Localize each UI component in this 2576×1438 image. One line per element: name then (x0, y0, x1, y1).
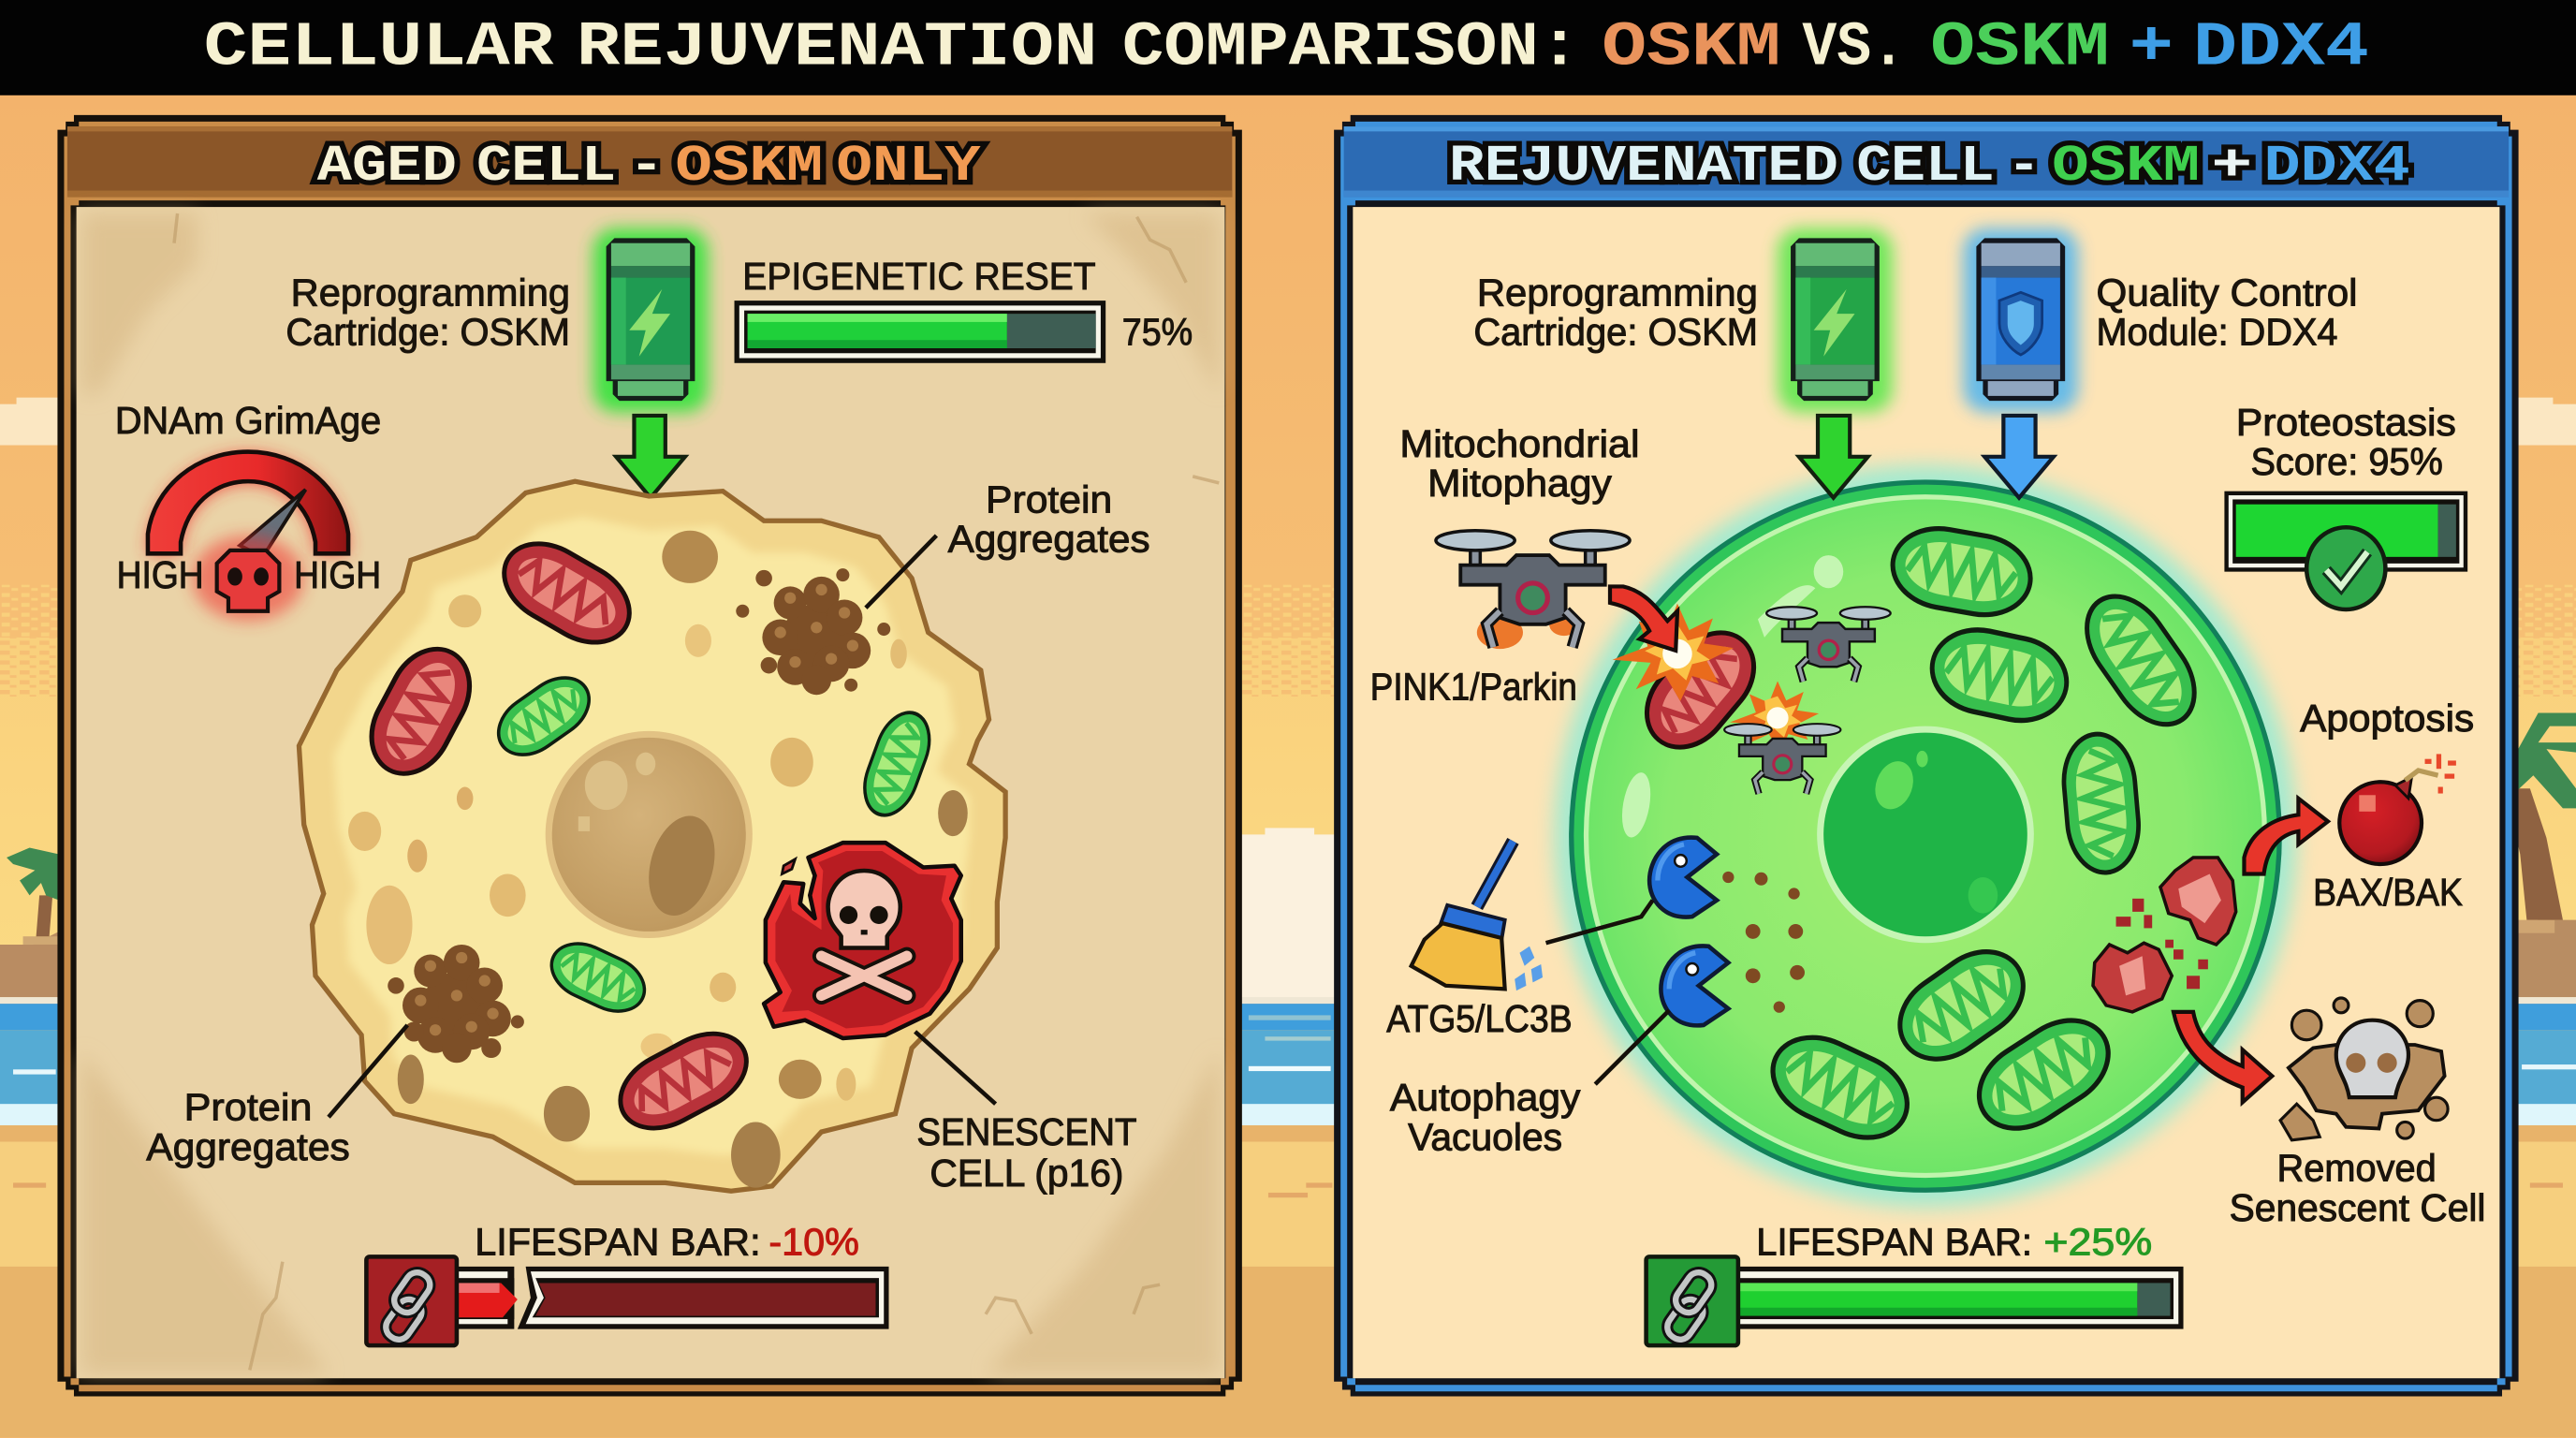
icon: DDX4 quality control module (1963, 228, 2078, 412)
title: REJUVENATION (577, 12, 1097, 83)
label: protein aggregates upper: Aggregates (948, 518, 1150, 561)
label: autophagy vacuoles: Vacuoles (1408, 1115, 1562, 1158)
panel header: rejuvenated (1344, 126, 2509, 198)
nucleus (546, 731, 753, 938)
panel header: aged cell (67, 126, 1232, 198)
arrow: to removed cell (2174, 1012, 2272, 1102)
gauge: DNAm GrimAge: HIGH (117, 553, 204, 596)
lifespan bar: rejuvenated: +25% (2043, 1221, 2152, 1264)
proteostasis score (2224, 401, 2467, 609)
label: protein aggregates lower: Aggregates (146, 1125, 350, 1168)
epigenetic reset bar (735, 255, 1193, 363)
panel: aged cell, OSKM only (57, 115, 1242, 1397)
mitochondria: healthy (1759, 521, 2212, 1153)
label: senescent cell: CELL (p16) (929, 1152, 1123, 1195)
panel header: rejuvenated: + (2211, 139, 2252, 196)
label: autophagy vacuoles: Autophagy (1390, 1076, 1581, 1119)
label: quality control module: Module: DDX4 (2097, 310, 2338, 353)
panel header: rejuvenated: CELL (1856, 139, 1995, 196)
icon: removed senescent cell (2280, 998, 2448, 1140)
lifespan bar: rejuvenated (1647, 1221, 2184, 1345)
title: OSKM (1930, 12, 2110, 83)
label: reprogramming cartridge: Cartridge: OSKM (285, 310, 570, 353)
label: protein aggregates upper (948, 477, 1150, 561)
label: protein aggregates upper: Protein (986, 477, 1112, 521)
panel header: aged cell: AGED (317, 139, 457, 196)
label: BAX/BAK: BAX/BAK (2313, 871, 2463, 914)
panel header: aged cell: OSKM (675, 139, 823, 196)
rejuvenated cell (1554, 465, 2297, 1208)
label: reprogramming cartridge right: Cartridge: OSKM (1473, 310, 1758, 353)
label: reprogramming cartridge right: Reprogramming (1477, 271, 1758, 314)
title (204, 12, 2369, 83)
panel header: rejuvenated: - (2008, 139, 2041, 196)
label: quality control module: Quality Control (2097, 271, 2358, 314)
protein aggregates: lower (388, 945, 524, 1063)
aged cell (299, 481, 1005, 1191)
title: VS. (1802, 12, 1906, 83)
panel header: rejuvenated: OSKM (2052, 139, 2200, 196)
label: senescent cell (916, 1110, 1137, 1195)
label: mitochondrial mitophagy (1399, 422, 1640, 505)
label: removed senescent cell: Removed (2277, 1147, 2437, 1190)
lifespan bar: aged: -10% (768, 1221, 859, 1264)
explosion near small drone (1730, 681, 1819, 753)
lifespan bar: aged (366, 1221, 889, 1345)
epigenetic reset bar: EPIGENETIC RESET (742, 255, 1096, 298)
icon: OSKM reprogramming cartridge (593, 228, 708, 412)
label: reprogramming cartridge (285, 271, 570, 353)
nucleus (1817, 726, 2034, 943)
protein aggregates: upper (736, 568, 890, 695)
title bar (0, 0, 2576, 95)
label: senescent cell: SENESCENT (916, 1110, 1137, 1153)
label: ATG5/LC3B: ATG5/LC3B (1386, 997, 1573, 1040)
label: mitochondrial mitophagy: Mitophagy (1427, 462, 1613, 505)
epigenetic reset bar: 75% (1122, 310, 1193, 353)
proteostasis score: Score: 95% (2250, 440, 2443, 483)
arrow: OSKM into aged cell (616, 416, 685, 498)
proteostasis score: Proteostasis (2236, 401, 2456, 444)
label: PINK1/Parkin: PINK1/Parkin (1370, 666, 1577, 709)
title: CELLULAR (204, 12, 553, 83)
panel header: aged cell: ONLY (836, 139, 981, 196)
title: + (2130, 12, 2174, 83)
explosion on mitochondrion (1612, 604, 1734, 701)
apoptotic fragments (2093, 858, 2236, 1012)
arrow: DDX4 into cell (1984, 416, 2054, 498)
gauge: DNAm GrimAge (115, 399, 381, 621)
icon: bomb (2339, 754, 2456, 864)
panel header: rejuvenated: DDX4 (2264, 139, 2410, 196)
mitochondria: aged (356, 528, 939, 1143)
highlights (1617, 555, 1843, 840)
damaged mitochondrion (1630, 616, 1771, 764)
icon: OSKM cartridge (right) (1778, 228, 1893, 412)
title: DDX4 (2193, 12, 2369, 83)
label: protein aggregates lower: Protein (184, 1086, 312, 1129)
lifespan bar: aged: LIFESPAN BAR: (475, 1221, 761, 1264)
icon: broom (1412, 841, 1543, 990)
autophagy vacuole 1 (1649, 838, 1717, 917)
icon: mitophagy drone (1436, 531, 1630, 649)
vacuole spots (348, 531, 968, 1188)
title: OSKM (1602, 12, 1781, 83)
callouts: aged cell (329, 536, 996, 1117)
small drone 2 (1724, 724, 1840, 794)
panel: rejuvenated cell, OSKM + DDX4 (1334, 115, 2519, 1397)
label: protein aggregates lower (146, 1086, 350, 1168)
arrow: OSKM into cell (1799, 416, 1868, 498)
label: reprogramming cartridge right (1473, 271, 1758, 353)
autophagy vacuole 2 (1661, 946, 1728, 1025)
title: COMPARISON: (1122, 12, 1580, 83)
label: apoptosis: Apoptosis (2300, 697, 2474, 740)
label: quality control module (2097, 271, 2358, 353)
callouts: right panel (1546, 901, 1669, 1084)
lifespan bar: rejuvenated: LIFESPAN BAR: (1756, 1221, 2032, 1264)
label: removed senescent cell: Senescent Cell (2230, 1186, 2485, 1229)
panel header: aged cell: - (629, 139, 664, 196)
arrow: drone to mitochondrion (1610, 586, 1677, 651)
gauge: DNAm GrimAge: DNAm GrimAge (115, 399, 381, 442)
gauge: DNAm GrimAge: HIGH (294, 553, 381, 596)
panel header: rejuvenated: REJUVENATED (1449, 139, 1838, 196)
label: mitochondrial mitophagy: Mitochondrial (1399, 422, 1640, 465)
senescent cell blob (764, 843, 961, 1038)
label: reprogramming cartridge: Reprogramming (291, 271, 570, 314)
label: autophagy vacuoles (1390, 1076, 1581, 1158)
cargo particles (1722, 872, 1805, 1013)
label: removed senescent cell (2230, 1147, 2485, 1229)
arrow: to apoptosis (2244, 799, 2328, 874)
panel header: aged cell: CELL (476, 139, 616, 196)
small drone 1 (1766, 607, 1891, 682)
